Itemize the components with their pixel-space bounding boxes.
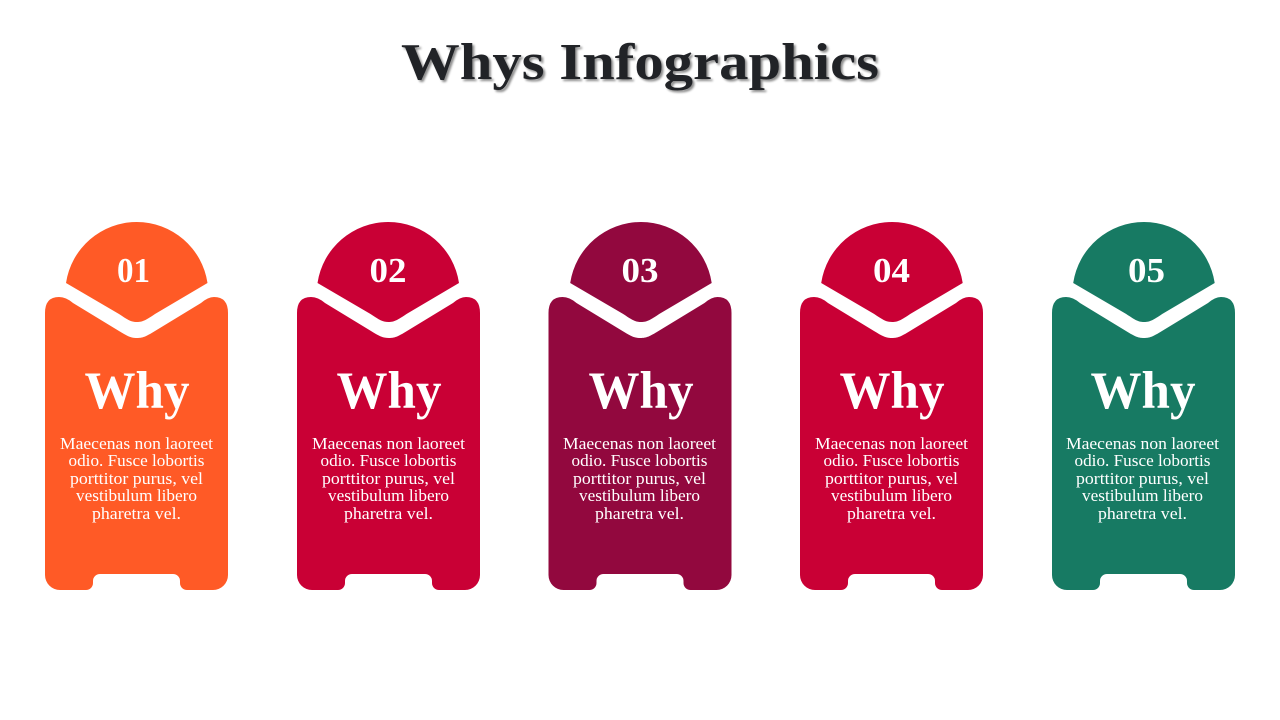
text block 05: odio. Fusce lobortis — [1074, 451, 1210, 470]
semicircle cap 04 — [821, 222, 963, 322]
text block 01: odio. Fusce lobortis — [68, 451, 204, 470]
text block 01 — [60, 434, 213, 523]
text block 01: pharetra vel. — [92, 504, 181, 523]
number 04: 04 — [873, 251, 910, 290]
card body 02 — [297, 297, 480, 590]
number 05: 05 — [1128, 251, 1165, 290]
semicircle cap 03 — [570, 222, 712, 322]
text block 02: porttitor purus, vel — [322, 469, 455, 488]
text block 01: Maecenas non laoreet — [60, 434, 213, 453]
text block 05: porttitor purus, vel — [1076, 469, 1209, 488]
text block 03 — [563, 434, 716, 523]
text block 02: Maecenas non laoreet — [312, 434, 465, 453]
text block 05: pharetra vel. — [1098, 504, 1187, 523]
text block 04 — [815, 434, 968, 523]
panel: why 02 — [297, 222, 480, 590]
semicircle cap 02 — [318, 222, 459, 322]
card body 04 — [800, 297, 983, 590]
text block 03: Maecenas non laoreet — [563, 434, 716, 453]
card body 01 — [45, 297, 228, 590]
heading 03: Why — [588, 362, 694, 420]
text block 04: pharetra vel. — [847, 504, 936, 523]
text block 05 — [1066, 434, 1219, 523]
title: Whys Infographics — [401, 34, 879, 91]
heading 01: Why — [84, 362, 190, 420]
heading 04: Why — [840, 362, 944, 420]
semicircle cap 01 — [66, 222, 208, 322]
text block 03: odio. Fusce lobortis — [572, 451, 708, 470]
heading 05: Why — [1090, 362, 1196, 420]
number 02: 02 — [370, 251, 406, 290]
text block 04: vestibulum libero — [831, 486, 952, 505]
text block 04: odio. Fusce lobortis — [824, 451, 960, 470]
number 03: 03 — [622, 251, 658, 290]
panel: why 04 — [800, 222, 983, 590]
panel: why 03 — [548, 222, 732, 590]
heading 02: Why — [336, 362, 442, 420]
semicircle cap 05 — [1073, 222, 1215, 322]
text block 05: Maecenas non laoreet — [1066, 434, 1219, 453]
text block 03: vestibulum libero — [579, 486, 700, 505]
panel: why 05 — [1052, 222, 1235, 590]
text block 04: porttitor purus, vel — [825, 469, 958, 488]
text block 02 — [312, 434, 465, 523]
text block 04: Maecenas non laoreet — [815, 434, 968, 453]
text block 02: vestibulum libero — [328, 486, 449, 505]
text block 01: vestibulum libero — [76, 486, 197, 505]
text block 02: odio. Fusce lobortis — [320, 451, 456, 470]
panel: why 01 — [45, 222, 228, 590]
text block 02: pharetra vel. — [344, 504, 433, 523]
text block 05: vestibulum libero — [1082, 486, 1203, 505]
card body 05 — [1052, 297, 1235, 590]
text block 01: porttitor purus, vel — [70, 469, 203, 488]
card body 03 — [548, 297, 732, 590]
number 01: 01 — [117, 251, 150, 290]
text block 03: porttitor purus, vel — [573, 469, 706, 488]
text block 03: pharetra vel. — [595, 504, 684, 523]
